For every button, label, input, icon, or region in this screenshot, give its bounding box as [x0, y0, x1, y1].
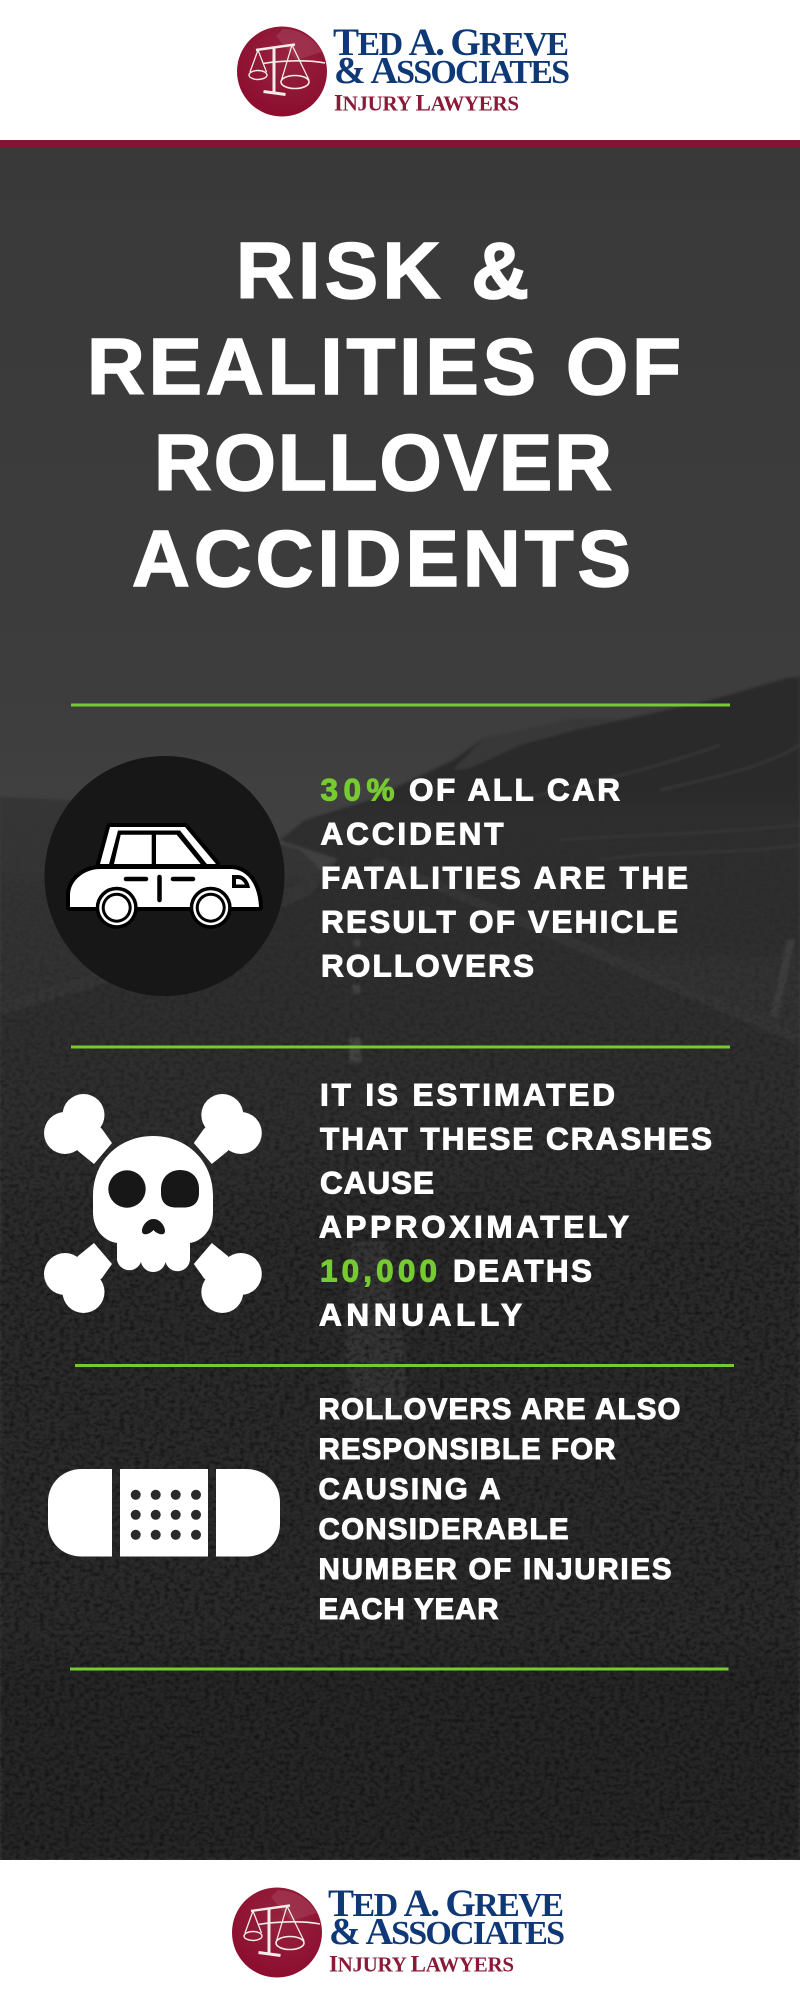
stat text: 10,000 deaths: 10,000: [320, 1252, 437, 1288]
burgundy header bar: [0, 140, 800, 147]
bone top right: [194, 1094, 262, 1164]
white footer band: [0, 1860, 800, 2000]
stat text: 10,000 deaths: IT IS ESTIMATED: [320, 1076, 615, 1112]
icon: skull and crossbones: [44, 1094, 262, 1313]
stat text: 10,000 deaths: APPROXIMATELY: [319, 1208, 629, 1244]
stat text: 30% of fatalities: FATALITIES ARE THE: [321, 860, 688, 896]
stat text: injuries: RESPONSIBLE FOR: [318, 1433, 616, 1466]
stat text: 30% of fatalities: ROLLOVERS: [321, 948, 534, 984]
stat text: injuries: ROLLOVERS ARE ALSO: [318, 1393, 680, 1426]
green divider 3: [75, 1364, 734, 1367]
title: RISK &: [236, 226, 529, 315]
logo seal with scales of justice: [237, 26, 327, 116]
title: ROLLOVER: [154, 418, 612, 507]
bone bottom left: [44, 1243, 112, 1313]
title: REALITIES OF: [87, 322, 681, 411]
top logo: Ted A. Greve & Associates: [237, 21, 570, 116]
logo tagline: INJURY LAWYERS: [334, 90, 519, 116]
bottom logo: Ted A. Greve & Associates: [232, 1882, 565, 1978]
stat text: 10,000 deaths: THAT THESE CRASHES: [320, 1120, 712, 1156]
green divider 2: [71, 1046, 730, 1048]
stat text: 10,000 deaths: [319, 1076, 712, 1332]
stat text: injuries: NUMBER OF INJURIES: [318, 1553, 672, 1586]
bone bottom right: [194, 1243, 262, 1313]
stat text: 10,000 deaths: DEATHS: [453, 1252, 592, 1288]
stat text: 10,000 deaths: CAUSE: [320, 1164, 434, 1200]
footer logo name line 2: & ASSOCIATES: [329, 1911, 565, 1953]
footer logo seal: [232, 1888, 322, 1978]
stat text: injuries: CAUSING A: [318, 1473, 500, 1506]
stat text: 30% of fatalities: RESULT OF VEHICLE: [321, 904, 678, 940]
bone top left: [44, 1094, 112, 1164]
title: [87, 226, 681, 603]
icon: bandage: [48, 1469, 280, 1556]
footer logo tagline: INJURY LAWYERS: [329, 1952, 514, 1976]
green divider 1: [71, 704, 730, 706]
stat text: 30% of fatalities: [320, 772, 688, 984]
stat text: 30% of fatalities: ACCIDENT: [320, 816, 504, 852]
skull: [93, 1136, 213, 1272]
logo name line 2: & ASSOCIATES: [334, 50, 570, 92]
title: ACCIDENTS: [132, 514, 631, 603]
stat text: injuries: CONSIDERABLE: [318, 1513, 568, 1546]
stat text: 30% of fatalities: OF ALL CAR: [409, 772, 620, 808]
green divider 4: [70, 1668, 728, 1670]
stat text: injuries: EACH YEAR: [318, 1593, 498, 1626]
stat text: 30% of fatalities: 30%: [320, 772, 394, 808]
stat text: 10,000 deaths: ANNUALLY: [319, 1296, 522, 1332]
icon: car in dark circle: [44, 756, 284, 996]
stat text: injuries: [318, 1393, 680, 1626]
footer logo name: TED A. GREVE: [328, 1882, 564, 1925]
logo name: TED A. GREVE: [333, 21, 569, 64]
